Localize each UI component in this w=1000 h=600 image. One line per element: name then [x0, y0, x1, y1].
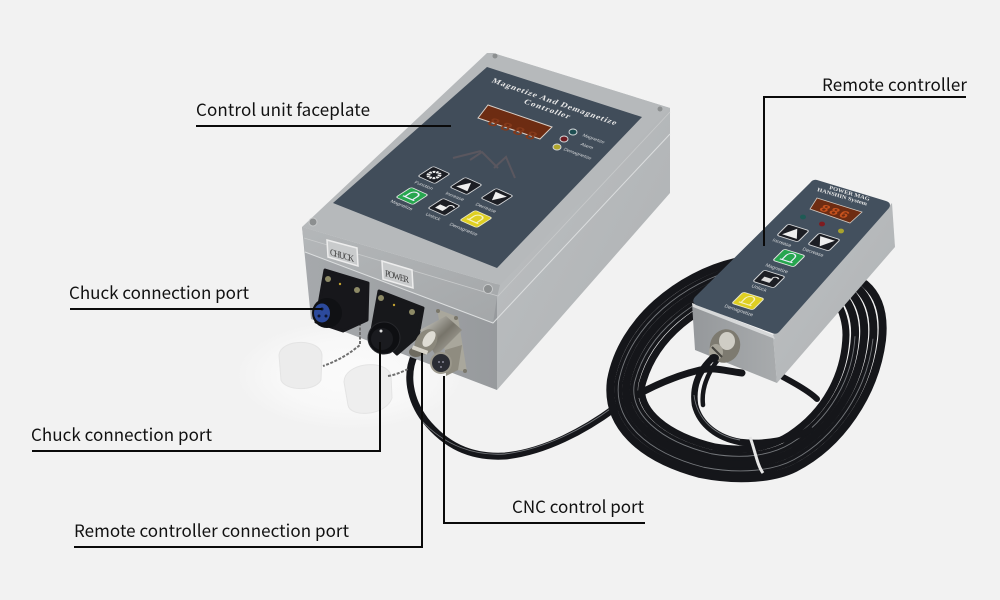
status LEDs: [553, 129, 606, 161]
remote controller: [692, 180, 895, 383]
box lid top: [302, 53, 670, 285]
button: Demagnetize: [460, 210, 492, 228]
button: Function: [418, 166, 450, 184]
remote button: Magnetize: [773, 249, 805, 267]
label: Remote controller connection port: [74, 517, 350, 542]
control unit box: Decrease: [474, 202, 498, 214]
button: Unlock: [428, 198, 460, 216]
remote title: POWER MAG: [829, 186, 871, 203]
cable gland: [705, 325, 745, 367]
remote controller: Increase: [771, 238, 793, 249]
control unit box: Function: [413, 180, 435, 192]
remote LED display: 886: [815, 203, 853, 222]
button: Decrease: [481, 188, 513, 206]
callout: Chuck connection port (lower): [31, 342, 380, 451]
faceplate logo: [453, 151, 515, 178]
status LEDs: Demagnetize: [562, 147, 593, 161]
label: Remote controller: [822, 71, 967, 96]
callout: Remote controller: [764, 71, 967, 246]
power connector (black): [368, 291, 423, 354]
remote faceplate: [693, 180, 890, 334]
box side: [493, 53, 670, 390]
remote status LEDs: [800, 215, 844, 233]
callout: CNC control port: [444, 376, 645, 523]
status LEDs: Magnetize: [581, 133, 606, 145]
screws: [309, 54, 662, 294]
POWER tag: POWER: [385, 268, 409, 285]
remote button: Decrease: [808, 233, 840, 251]
protective caps and chains: [279, 323, 408, 413]
remote side: [773, 203, 895, 383]
control unit box: Increase: [444, 191, 466, 203]
CHUCK tag: [327, 240, 358, 266]
box front: [302, 227, 497, 390]
faceplate: [333, 67, 642, 268]
remote controller: Decrease: [801, 247, 825, 259]
cable coil: [610, 262, 883, 478]
POWER tag: [382, 261, 413, 288]
remote button: Increase: [777, 224, 809, 242]
control unit box: Magnetize: [389, 199, 414, 212]
remote controller: Magnetize: [764, 263, 789, 275]
LED display: 8888: [483, 115, 544, 145]
remote controller: Demagnetize: [723, 304, 755, 318]
remote title: HANSHIN System: [817, 188, 868, 207]
callout: Remote controller connection port: [74, 353, 422, 547]
button: Magnetize: [396, 187, 428, 205]
remote front: [692, 303, 777, 383]
control unit box: [302, 53, 670, 390]
faceplate title: Controller: [522, 97, 573, 120]
remote and CNC metal connectors: [409, 309, 467, 376]
label: Control unit faceplate: [196, 96, 370, 121]
control unit box: Unlock: [424, 212, 442, 222]
faceplate title: Magnetize And Demagnetize: [490, 76, 620, 127]
control unit box: Demagnetize: [448, 222, 479, 237]
CHUCK tag: CHUCK: [330, 247, 354, 264]
button: Increase: [450, 177, 482, 195]
label: Chuck connection port: [69, 279, 250, 304]
chuck connector (blue): [312, 270, 368, 331]
remote controller: Unlock: [750, 284, 768, 294]
cable tie: [750, 437, 763, 473]
status LEDs: Alarm: [579, 142, 595, 151]
remote LED display: [810, 198, 862, 223]
label: CNC control port: [512, 493, 645, 518]
remote button: Unlock: [753, 270, 785, 288]
LED display: [478, 105, 552, 145]
label: Chuck connection port: [31, 421, 213, 446]
remote button: Demagnetize: [732, 292, 764, 310]
cable from remote connector to coil: [410, 354, 742, 456]
